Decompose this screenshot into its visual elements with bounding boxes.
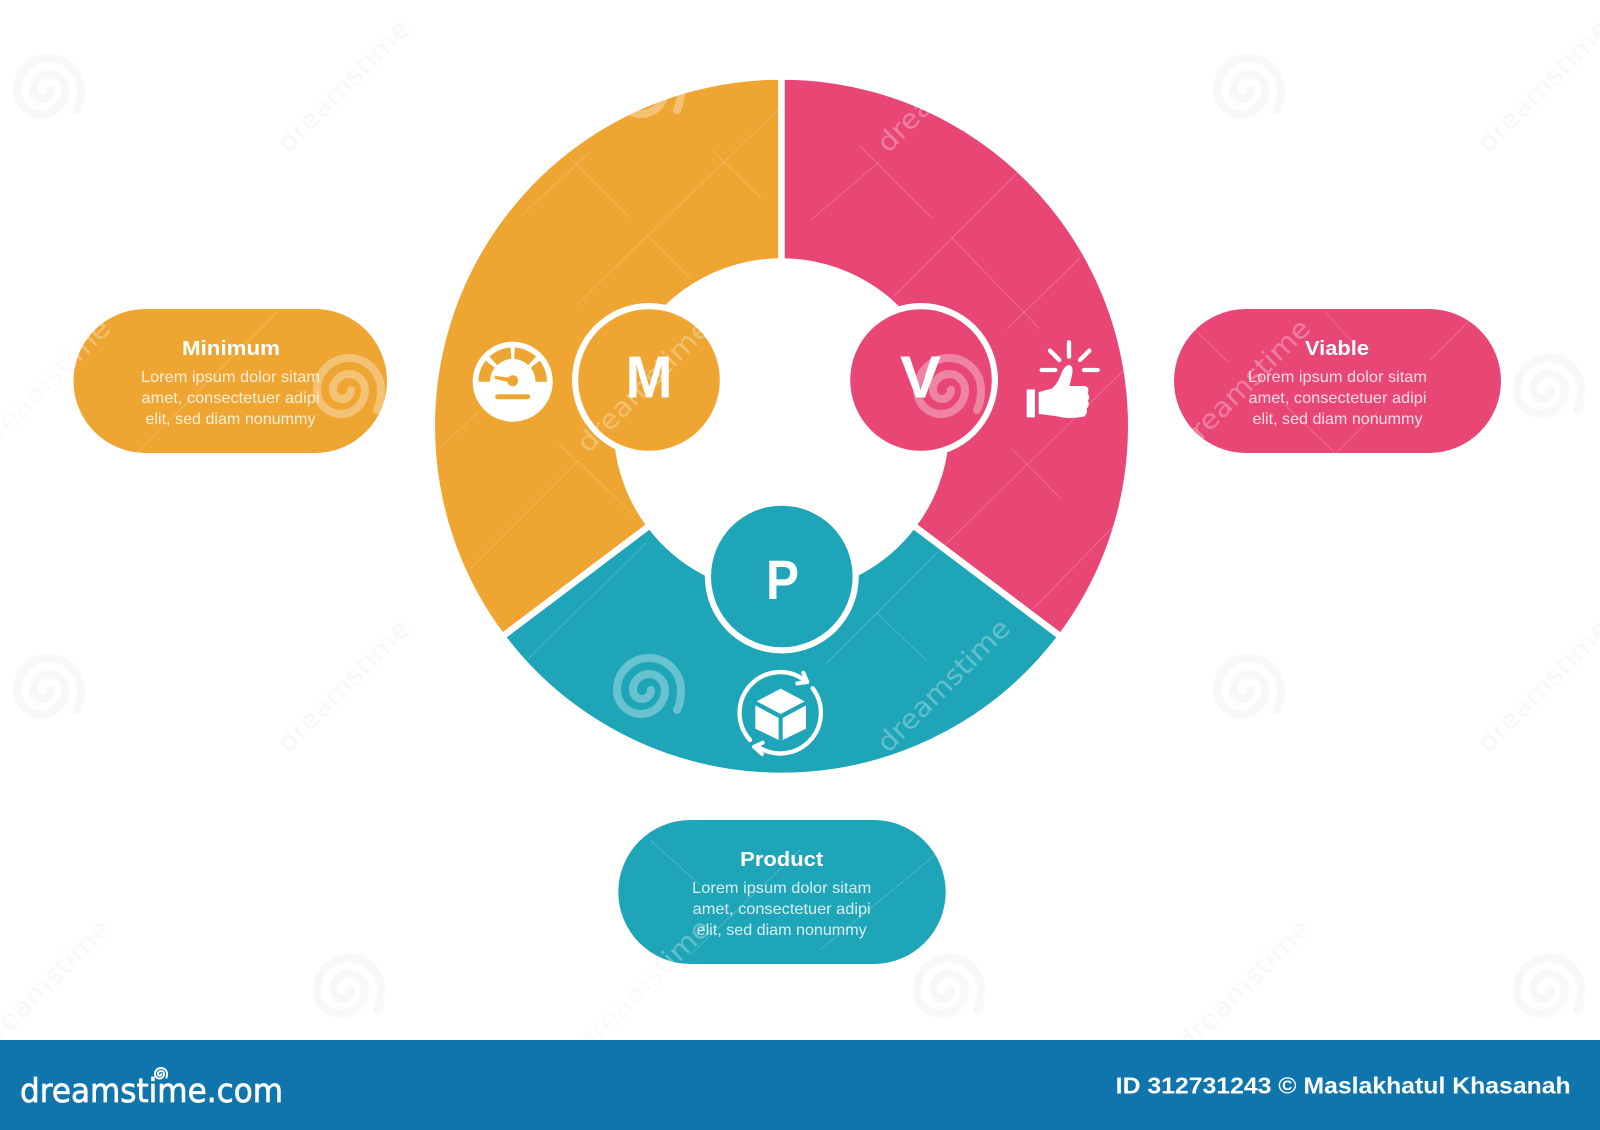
panel: Viable — [1174, 309, 1501, 453]
letter circle: P: P — [766, 548, 799, 611]
footer image credit: ID 312731243 © Maslakhatul Khasanah — [1116, 1072, 1571, 1098]
text block: Minimum description — [141, 369, 320, 428]
text block: Product description: elit, sed diam nonummy — [697, 922, 867, 939]
text block: Product description: amet, consectetuer adipi — [693, 901, 871, 918]
translucent watermark over coloured shapes: dreamstime — [871, 613, 1017, 759]
faint watermark on white background: dreamstime — [271, 13, 417, 159]
segment: product (teal) — [502, 525, 1061, 776]
footer logo text: dreamstime.com — [20, 1071, 283, 1110]
text block: Viable description: amet, consectetuer adipi — [1248, 390, 1426, 407]
text block: Product description: Lorem ipsum dolor sitam — [692, 880, 871, 897]
translucent watermark over coloured shapes: dreamstime — [1171, 313, 1317, 459]
heading: Viable: Viable — [1305, 338, 1369, 360]
icon: speedometer gauge — [473, 342, 553, 422]
translucent watermark over coloured shapes: dreamstime — [871, 13, 1017, 159]
segment: viable (pink) — [782, 76, 1131, 637]
text block: Minimum description: Lorem ipsum dolor sitam — [141, 369, 320, 386]
segment: minimum (orange) — [432, 76, 782, 637]
faint watermark on white background: dreamstime — [571, 913, 717, 1059]
footer bar — [0, 1040, 1600, 1130]
translucent watermark over coloured shapes: dreamstime — [571, 313, 717, 459]
text block: Product description — [692, 880, 871, 939]
letter circle: M — [572, 303, 726, 457]
faint watermark on white background: dreamstime — [1171, 913, 1317, 1059]
heading: Minimum: Minimum — [182, 338, 280, 360]
icon: thumbs up with rays — [1027, 342, 1098, 418]
icon: box with rotating arrows — [740, 672, 821, 754]
text block: Viable description — [1248, 369, 1427, 428]
text block: Viable description: Lorem ipsum dolor sitam — [1248, 369, 1427, 386]
text block: Minimum description: amet, consectetuer adipi — [142, 390, 320, 407]
text block: Viable description: elit, sed diam nonummy — [1252, 411, 1422, 428]
letter circle: V — [844, 303, 998, 457]
text block: Minimum description: elit, sed diam nonummy — [146, 411, 316, 428]
letter circle: P — [705, 500, 859, 654]
panel: Product — [618, 820, 946, 964]
donut chart: three MVP segments — [432, 76, 1131, 776]
letter circle: M: M — [626, 344, 672, 410]
icon: footer logo swirl — [155, 1068, 167, 1079]
panel: Minimum — [74, 309, 387, 453]
heading: Product: Product — [740, 849, 824, 871]
translucent watermark over coloured shapes: dreamstime — [571, 913, 717, 1059]
letter circle: V: V — [900, 344, 941, 410]
faint watermark on white background: dreamstime — [271, 613, 417, 759]
